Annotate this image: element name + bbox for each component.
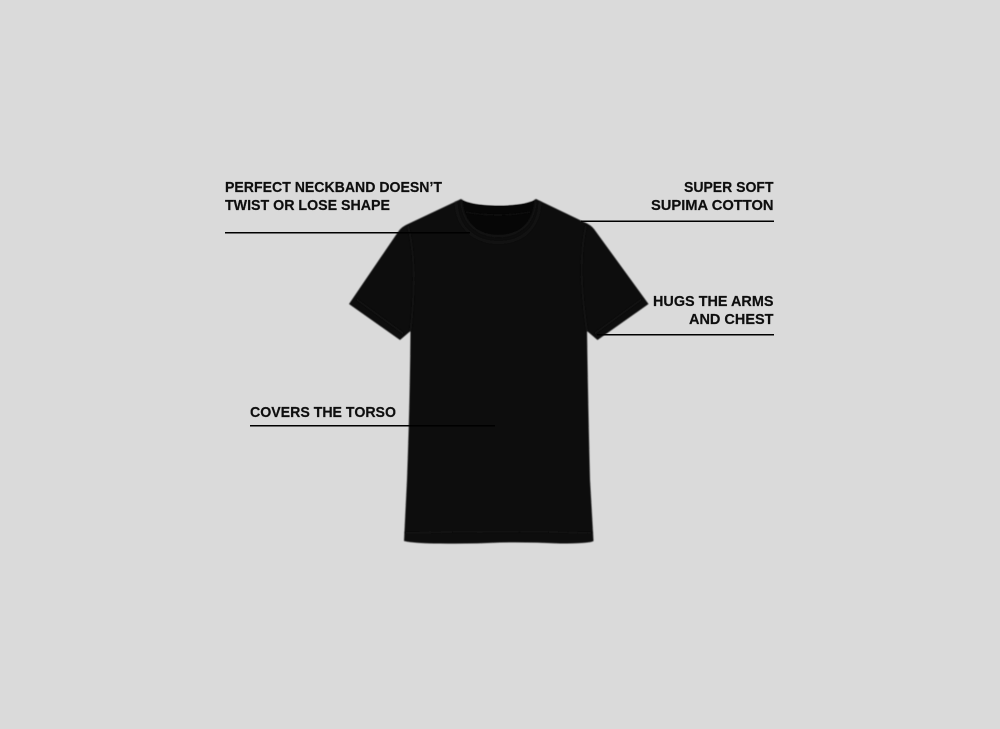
neckband label bbox=[225, 180, 442, 214]
torso label: COVERS THE TORSO bbox=[250, 405, 396, 421]
callout: neckband bbox=[225, 180, 470, 234]
cotton label bbox=[651, 180, 774, 214]
neckband label: PERFECT NECKBAND DOESN’T bbox=[225, 180, 442, 196]
callout: cotton bbox=[581, 180, 774, 222]
cotton leader line bbox=[581, 220, 774, 222]
cotton label: SUPER SOFT bbox=[684, 180, 774, 196]
arms label: HUGS THE ARMS bbox=[653, 294, 774, 310]
arms label bbox=[653, 294, 774, 328]
callout: arms and chest bbox=[597, 294, 774, 336]
neckband label: TWIST OR LOSE SHAPE bbox=[225, 198, 390, 214]
neckband leader line bbox=[225, 232, 470, 234]
t-shirt bbox=[349, 199, 648, 544]
arms leader line bbox=[597, 334, 774, 336]
torso leader line bbox=[250, 425, 495, 426]
arms label: AND CHEST bbox=[689, 312, 774, 328]
cotton label: SUPIMA COTTON bbox=[651, 198, 774, 214]
